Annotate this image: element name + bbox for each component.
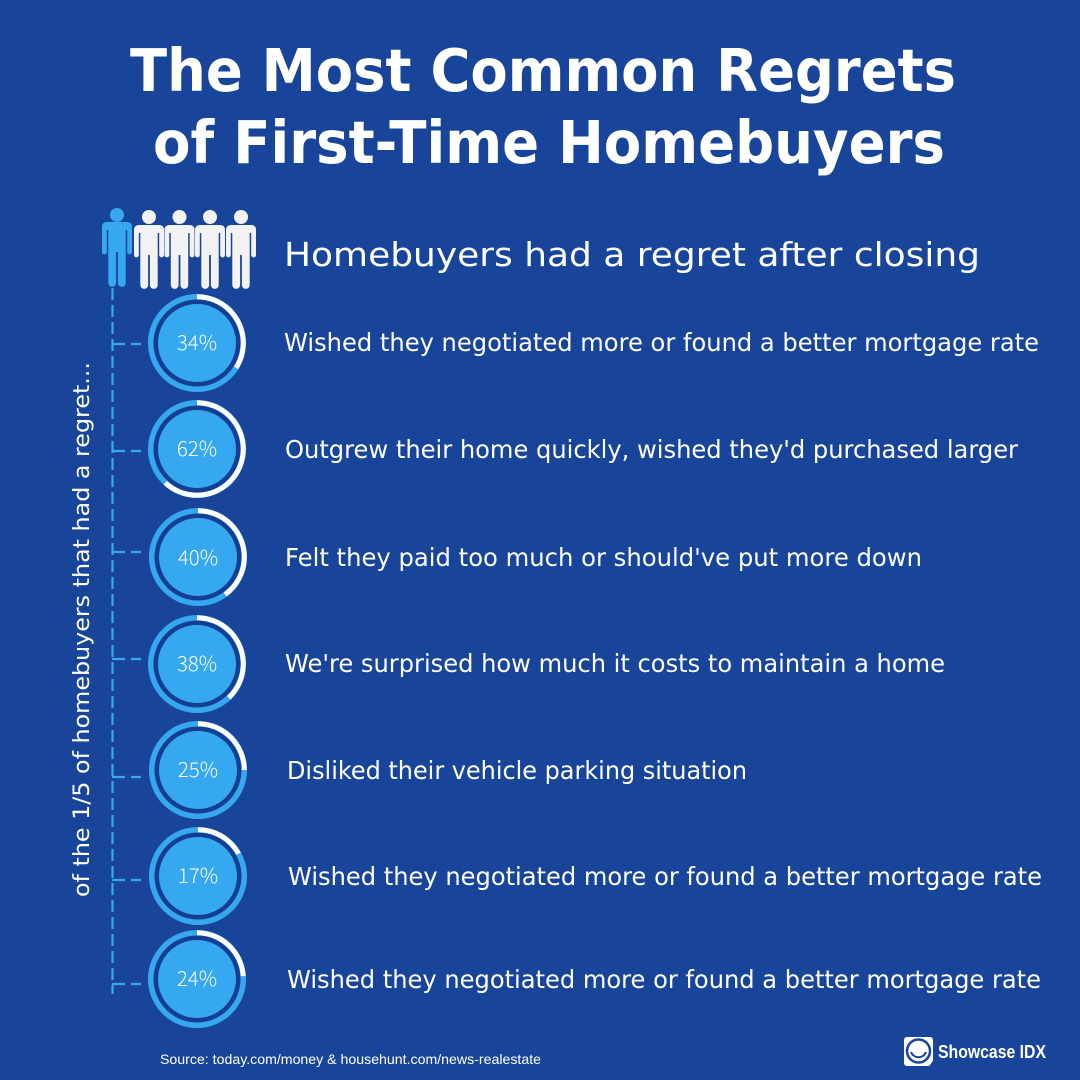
logo: Showcase IDX [904,1037,1047,1066]
row: 17%: Wished they negotiated more or found a better mortgage rate [288,862,1042,891]
vertical axis label: of the 1/5 of homebuyers that had a regret... [70,362,95,897]
row: 34% [151,297,1039,389]
row: 17% [152,830,1042,922]
subheading: Homebuyers had a regret after closing [284,235,980,274]
source note: Source: today.com/money & househunt.com/news-realestate [160,1051,541,1067]
row: 17%: 17% [178,859,218,889]
row: 62%: Outgrew their home quickly, wished they'd purchased larger [285,435,1019,464]
row: 25%: Disliked their vehicle parking situation [287,756,747,785]
row: 40%: Felt they paid too much or should've put more down [285,543,922,572]
row: 24% [151,933,1041,1025]
title: of First-Time Homebuyers [153,108,945,177]
row: 40% [152,511,922,603]
row: 40%: 40% [178,541,218,571]
row: 24%: 24% [177,962,217,992]
row: 38% [151,618,945,710]
title [130,36,956,177]
dashed timeline connector [112,288,141,994]
row: 24%: Wished they negotiated more or found a better mortgage rate [287,965,1041,994]
icon: five people, one highlighted [102,208,256,289]
row: 25%: 25% [178,753,218,783]
title: The Most Common Regrets [130,36,956,105]
logo: Showcase IDX: Showcase IDX [938,1041,1047,1062]
row: 62%: 62% [177,432,217,462]
row: 38%: We're surprised how much it costs to maintain a home [285,649,945,678]
row: 34%: Wished they negotiated more or found a better mortgage rate [284,328,1039,357]
row: 25% [152,724,747,816]
row: 34%: 34% [177,326,217,356]
row: 62% [151,403,1019,495]
row: 38%: 38% [177,647,217,677]
